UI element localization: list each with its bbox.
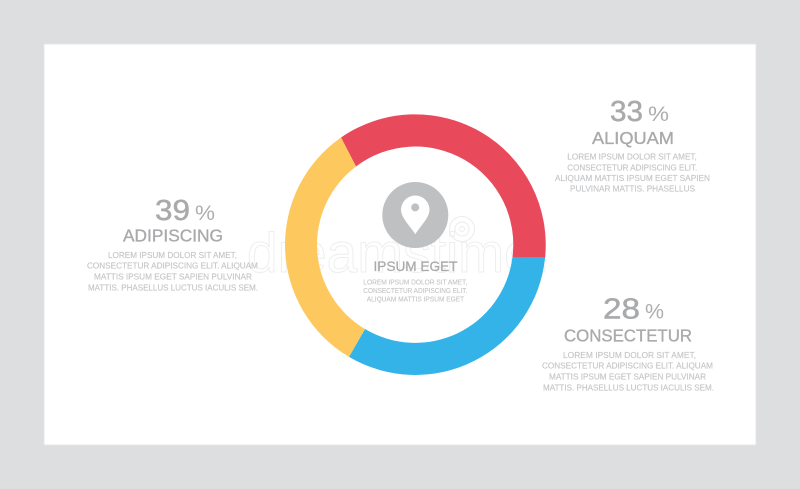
center body xyxy=(363,278,467,304)
callout: 39% adipiscing xyxy=(87,195,258,292)
body: MATTIS. PHASELLUS LUCTUS IACULIS SEM. xyxy=(88,282,258,292)
donut chart xyxy=(285,114,546,375)
segment: blue 28% xyxy=(349,258,545,375)
body xyxy=(542,350,714,392)
segment: red 33% xyxy=(341,114,546,258)
body xyxy=(87,250,258,292)
callout: 28% consectetur xyxy=(542,294,714,392)
value: 33 xyxy=(610,96,643,128)
body: PULVINAR MATTIS. PHASELLUS xyxy=(570,184,695,194)
center body: ALIQUAM MATTIS IPSUM EGET xyxy=(367,294,465,304)
heading: ADIPISCING xyxy=(123,226,223,246)
center text xyxy=(363,258,467,304)
body: LOREM IPSUM DOLOR SIT AMET, xyxy=(108,250,237,260)
percent sign: % xyxy=(648,103,669,126)
center heading: IPSUM EGET xyxy=(374,258,458,274)
heading: ALIQUAM xyxy=(592,128,674,148)
body: MATTIS. PHASELLUS LUCTUS IACULIS SEM. xyxy=(543,382,714,392)
center icon: map pin xyxy=(382,182,448,248)
watermark: dreamstime. xyxy=(247,221,550,284)
value: 28 xyxy=(603,294,640,326)
percent sign: % xyxy=(645,300,664,324)
callout: 33% aliquam xyxy=(555,96,710,194)
heading: CONSECTETUR xyxy=(564,326,692,346)
body: MATTIS IPSUM EGET SAPIEN PULVINAR xyxy=(94,272,252,282)
center body: CONSECTETUR ADIPISCING ELIT. xyxy=(363,286,467,295)
body: LOREM IPSUM DOLOR SIT AMET, xyxy=(567,152,697,162)
body xyxy=(555,152,710,194)
percent sign: % xyxy=(195,202,215,225)
body: CONSECTETUR ADIPISCING ELIT. xyxy=(567,162,697,172)
body: LOREM IPSUM DOLOR SIT AMET, xyxy=(563,350,696,360)
center body: LOREM IPSUM DOLOR SIT AMET, xyxy=(363,278,467,286)
white panel xyxy=(44,44,756,445)
body: MATTIS IPSUM EGET SAPIEN PULVINAR xyxy=(549,372,706,382)
value: 39 xyxy=(155,195,190,227)
body: CONSECTETUR ADIPISCING ELIT. ALIQUAM xyxy=(542,360,713,370)
body: CONSECTETUR ADIPISCING ELIT. ALIQUAM xyxy=(87,260,258,270)
segment: yellow 39% xyxy=(285,138,365,357)
body: ALIQUAM MATTIS IPSUM EGET SAPIEN xyxy=(555,173,710,183)
